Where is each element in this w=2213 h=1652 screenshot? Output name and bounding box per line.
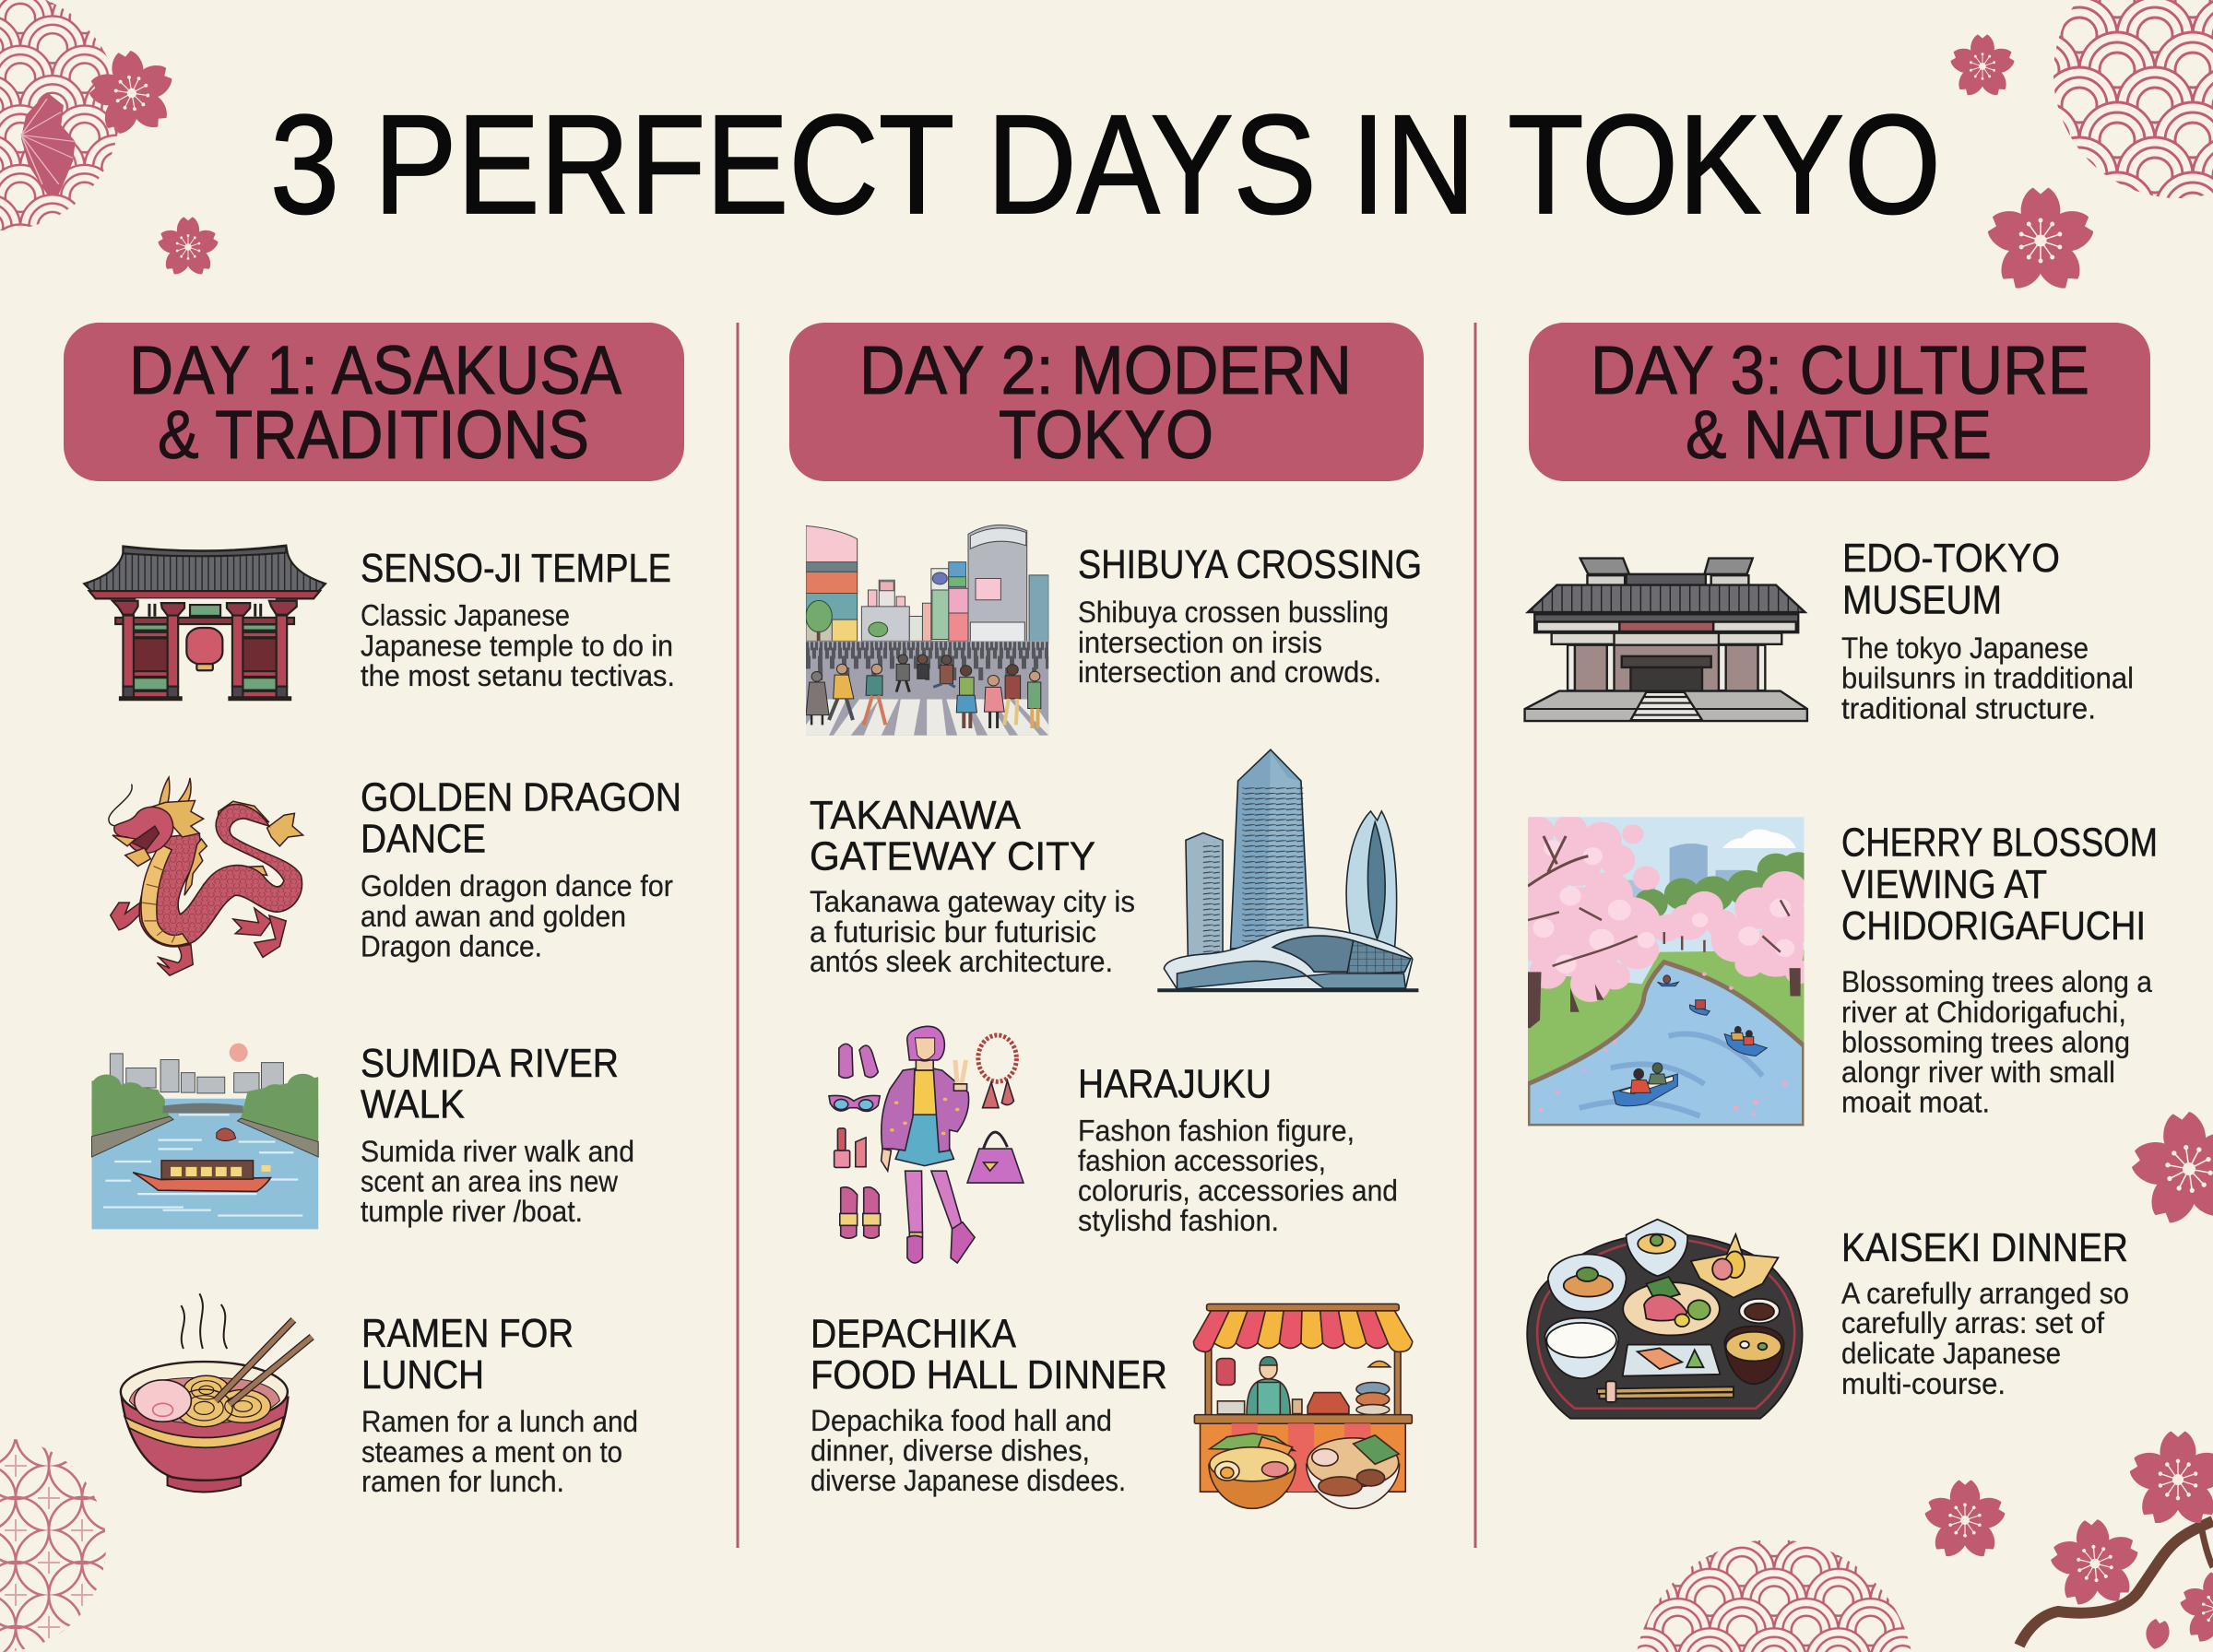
decoration: seigaiha top right — [2053, 0, 2213, 198]
text: golden dragon dance — [361, 776, 681, 963]
text: shibuya crossing: intersection and crowds. — [1078, 655, 1381, 689]
text: golden dragon dance: Dragon dance. — [361, 930, 542, 963]
text: takanawa gateway city: antós sleek architecture. — [810, 945, 1113, 978]
text: kaiseki dinner: multi-course. — [1841, 1367, 2006, 1400]
heading: day 2 — [789, 323, 1424, 481]
text: golden dragon dance: and awan and golden — [361, 900, 626, 933]
panel: day 3 — [1514, 323, 2158, 1419]
heading: day 3: DAY 3: CULTURE — [1591, 332, 2089, 408]
icon: harajuku fashion figure — [829, 1026, 1024, 1263]
text: cherry blossom viewing: VIEWING AT — [1841, 863, 2047, 907]
text: ramen for lunch — [361, 1312, 638, 1498]
text: depachika food hall dinner: DEPACHIKA — [811, 1312, 1016, 1356]
text: sumida river walk — [361, 1042, 634, 1228]
text: takanawa gateway city: GATEWAY CITY — [810, 835, 1095, 879]
text: harajuku: Fashon fashion figure, — [1078, 1115, 1355, 1148]
text: cherry blossom viewing: blossoming trees along — [1841, 1025, 2130, 1058]
icon: takanawa towers — [1157, 749, 1418, 990]
text: sumida river walk: scent an area ins new — [361, 1164, 619, 1198]
decoration: blossoms top left — [80, 44, 220, 278]
text: takanawa gateway city — [810, 794, 1135, 978]
icon: senso-ji temple gate — [84, 546, 325, 699]
text: cherry blossom viewing: Blossoming trees along a — [1841, 965, 2152, 998]
decoration: blossoms top right — [1948, 34, 2097, 295]
decoration: folding fan — [21, 92, 76, 195]
text: takanawa gateway city: a futurisic bur futurisic — [810, 915, 1096, 949]
text: senso-ji temple: Japanese temple to do in — [361, 629, 673, 662]
text: golden dragon dance: DANCE — [361, 818, 486, 862]
icon: cherry blossoms at chidorigafuchi — [1514, 815, 1817, 1126]
text: sumida river walk: tumple river /boat. — [361, 1195, 583, 1228]
text: takanawa gateway city: Takanawa gateway city is — [810, 885, 1135, 918]
decoration: seigaiha bottom centre — [1637, 1540, 1911, 1652]
text: shibuya crossing — [1078, 543, 1422, 689]
text: golden dragon dance: Golden dragon dance for — [361, 869, 673, 903]
text: golden dragon dance: GOLDEN DRAGON — [361, 776, 681, 820]
panel: day 1 — [64, 323, 684, 1498]
decoration: seigaiha top left — [0, 0, 120, 230]
text: kaiseki dinner — [1841, 1226, 2129, 1400]
column divider right — [1473, 323, 1477, 1548]
icon: sumida river scene — [91, 1044, 318, 1229]
text: depachika food hall dinner: diverse Japanese disdees. — [811, 1464, 1126, 1497]
text: harajuku: stylishd fashion. — [1078, 1204, 1279, 1237]
text: sumida river walk: Sumida river walk and — [361, 1135, 634, 1168]
icon: edo-tokyo museum — [1525, 559, 1807, 721]
text: ramen for lunch: ramen for lunch. — [361, 1465, 564, 1498]
text: cherry blossom viewing: alongr river with small — [1841, 1056, 2115, 1089]
decoration: shippo bottom left — [0, 1438, 106, 1652]
decoration: cherry branch and blossoms bottom right — [1923, 1104, 2213, 1651]
icon: golden dragon — [109, 777, 303, 975]
text: kaiseki dinner: KAISEKI DINNER — [1841, 1226, 2128, 1270]
text: ramen for lunch: LUNCH — [361, 1353, 484, 1398]
heading: day 3: & NATURE — [1686, 396, 1992, 473]
text: ramen for lunch: Ramen for a lunch and — [361, 1405, 638, 1438]
heading: day 2: TOKYO — [999, 396, 1213, 473]
text: harajuku — [1078, 1063, 1398, 1237]
text: depachika food hall dinner: Depachika food hall and — [811, 1404, 1112, 1437]
text: ramen for lunch: steames a ment on to — [361, 1435, 622, 1469]
heading: day 1: & TRADITIONS — [158, 396, 589, 473]
text: depachika food hall dinner — [811, 1312, 1167, 1497]
heading: day 3 — [1529, 323, 2150, 481]
text: cherry blossom viewing: CHIDORIGAFUCHI — [1841, 904, 2146, 949]
heading: day 1: DAY 1: ASAKUSA — [129, 332, 622, 408]
icon: kaiseki dinner tray — [1527, 1220, 1803, 1419]
text: kaiseki dinner: carefully arras: set of — [1841, 1306, 2104, 1339]
text: cherry blossom viewing: river at Chidorigafuchi, — [1841, 996, 2126, 1029]
text: kaiseki dinner: A carefully arranged so — [1841, 1277, 2129, 1310]
icon: shibuya crossing scene — [806, 525, 1048, 736]
icon: ramen bowl — [121, 1293, 312, 1493]
title: 3 PERFECT DAYS IN TOKYO — [270, 86, 1941, 243]
text: depachika food hall dinner: FOOD HALL DINNER — [811, 1353, 1167, 1398]
text: edo-tokyo museum — [1841, 537, 2134, 725]
panel: day 2 — [789, 323, 1424, 1508]
text: ramen for lunch: RAMEN FOR — [361, 1312, 574, 1356]
text: harajuku: HARAJUKU — [1078, 1063, 1272, 1107]
text: harajuku: coloruris, accessories and — [1078, 1174, 1398, 1208]
text: edo-tokyo museum: MUSEUM — [1842, 578, 2002, 622]
text: senso-ji temple: the most setanu tectivas. — [361, 659, 675, 692]
column divider left — [736, 323, 740, 1548]
text: cherry blossom viewing — [1841, 821, 2158, 1119]
text: harajuku: fashion accessories, — [1078, 1144, 1326, 1177]
text: depachika food hall dinner: dinner, diverse dishes, — [811, 1434, 1090, 1468]
icon: food stall — [1193, 1304, 1413, 1508]
text: senso-ji temple: Classic Japanese — [361, 599, 570, 632]
text: shibuya crossing: intersection on irsis — [1078, 626, 1322, 659]
text: shibuya crossing: Shibuya crossen bussling — [1078, 596, 1389, 629]
text: cherry blossom viewing: CHERRY BLOSSOM — [1841, 821, 2158, 866]
heading: day 1 — [64, 323, 684, 481]
text: cherry blossom viewing: moait moat. — [1841, 1086, 1990, 1119]
text: shibuya crossing: SHIBUYA CROSSING — [1078, 543, 1422, 587]
text: senso-ji temple — [361, 547, 675, 692]
text: takanawa gateway city: TAKANAWA — [810, 794, 1021, 838]
text: sumida river walk: WALK — [361, 1082, 465, 1127]
text: kaiseki dinner: delicate Japanese — [1841, 1337, 2061, 1370]
heading: day 2: DAY 2: MODERN — [859, 332, 1352, 408]
text: edo-tokyo museum: EDO-TOKYO — [1842, 537, 2060, 581]
text: edo-tokyo museum: builsunrs in tradditional — [1841, 662, 2134, 695]
text: edo-tokyo museum: traditional structure. — [1841, 691, 2096, 725]
text: sumida river walk: SUMIDA RIVER — [361, 1042, 619, 1086]
text: senso-ji temple: SENSO-JI TEMPLE — [361, 547, 671, 591]
text: edo-tokyo museum: The tokyo Japanese — [1841, 631, 2089, 665]
